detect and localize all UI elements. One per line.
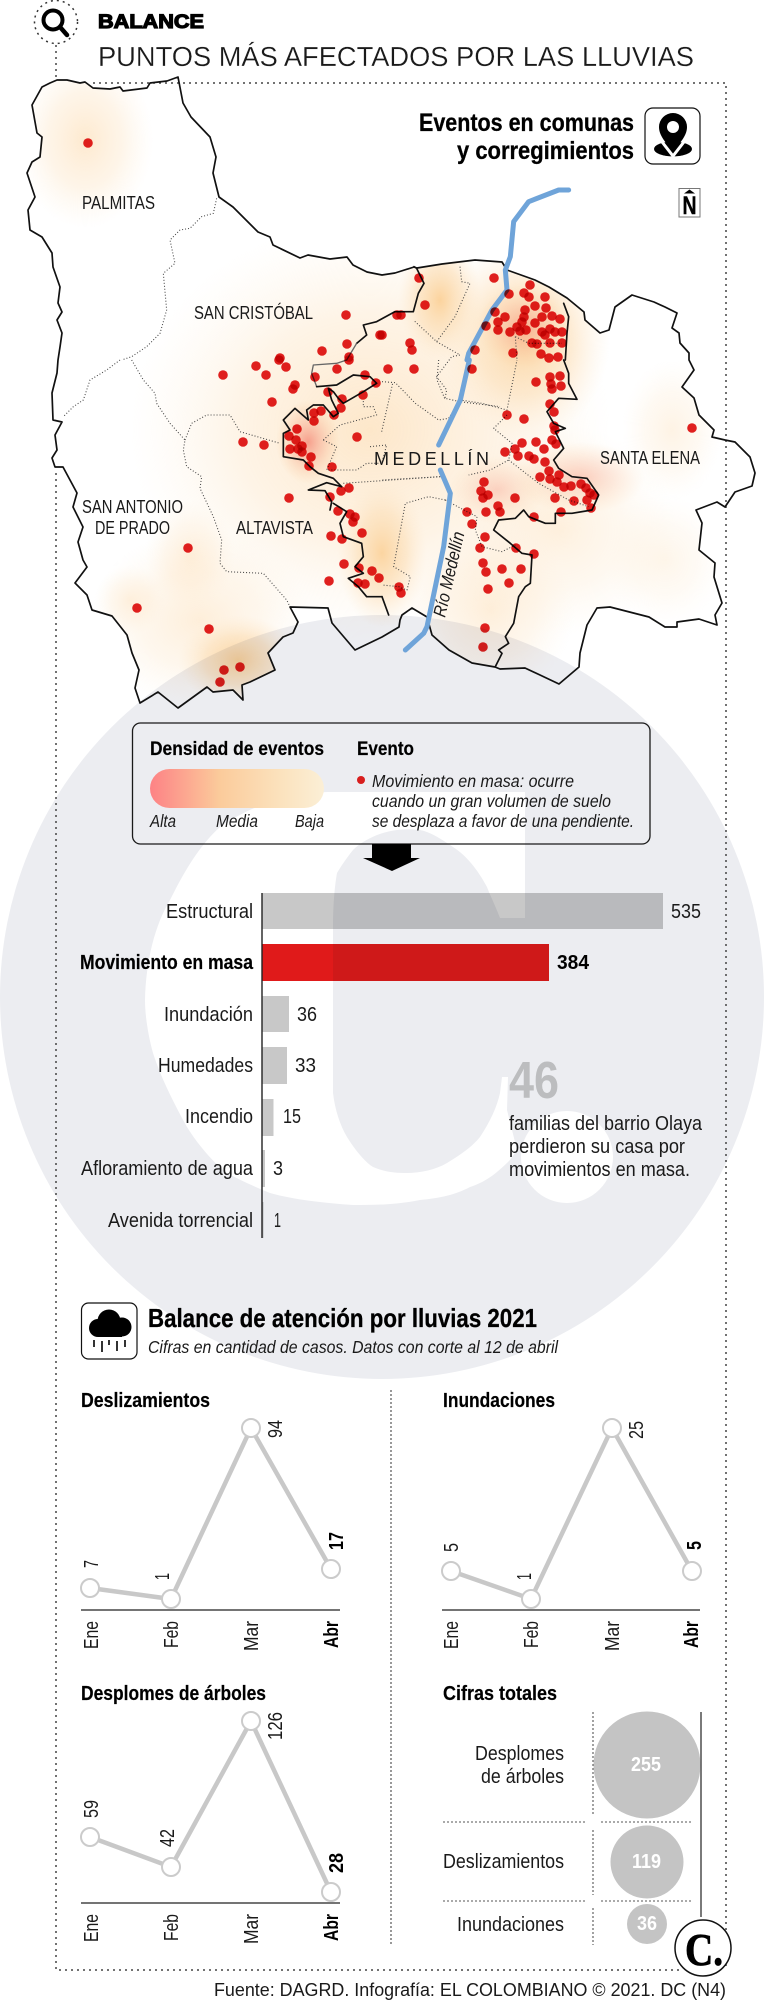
map place labels: DE PRADO bbox=[95, 518, 170, 538]
line chart: desplomes de árboles bbox=[81, 1683, 348, 1944]
line chart: deslizamientos: 1 bbox=[152, 1573, 174, 1580]
icon: map pin bbox=[645, 108, 700, 164]
line chart: inundaciones: 5 bbox=[684, 1541, 706, 1550]
legend: Alta bbox=[149, 811, 176, 831]
legend: Media bbox=[216, 811, 258, 831]
line chart: deslizamientos: Feb bbox=[161, 1621, 183, 1648]
panel: cifras totales: Inundaciones bbox=[457, 1914, 564, 1936]
map place labels bbox=[82, 193, 700, 619]
legend: Densidad de eventos bbox=[150, 738, 324, 760]
heading: balance de atención: Cifras en cantidad de casos. Datos con corte al 12 de abril bbox=[148, 1337, 559, 1357]
map heading: y corregimientos bbox=[457, 137, 634, 165]
map place labels: PALMITAS bbox=[82, 193, 155, 213]
panel: cifras totales: 119 bbox=[632, 1851, 661, 1873]
map place labels: SANTA ELENA bbox=[600, 448, 700, 468]
legend: Baja bbox=[295, 811, 324, 831]
line chart: inundaciones: Abr bbox=[681, 1621, 703, 1648]
line chart: desplomes de árboles: 126 bbox=[265, 1712, 287, 1740]
density heat blobs bbox=[34, 81, 706, 698]
line chart: inundaciones: 5 bbox=[441, 1543, 463, 1552]
density gradient scale bbox=[150, 769, 324, 808]
panel: cifras totales bbox=[443, 1683, 701, 1945]
bar labels: Movimiento en masa bbox=[80, 952, 254, 974]
bar labels: Avenida torrencial bbox=[108, 1210, 253, 1232]
line chart: inundaciones: Mar bbox=[602, 1621, 624, 1651]
map place labels: Río Medellín bbox=[429, 530, 468, 619]
legend: Evento bbox=[357, 738, 414, 760]
map place labels: SAN CRISTÓBAL bbox=[194, 302, 313, 323]
legend: se desplaza a favor de una pendiente. bbox=[372, 811, 634, 831]
line chart: deslizamientos: 17 bbox=[326, 1532, 348, 1550]
bar values: 33 bbox=[295, 1055, 316, 1077]
title: headline: PUNTOS MÁS AFECTADOS POR LAS LLUVIAS bbox=[98, 41, 694, 72]
bar labels: Inundación bbox=[164, 1004, 253, 1026]
panel: cifras totales: de árboles bbox=[481, 1766, 564, 1788]
panel: cifras totales: 255 bbox=[631, 1754, 661, 1776]
bar values: 3 bbox=[273, 1158, 283, 1180]
river: Río Medellín bbox=[405, 190, 569, 650]
source line: Fuente: DAGRD. Infografía: EL COLOMBIANO © 2021. DC (N4) bbox=[214, 1979, 726, 2000]
bar values: 36 bbox=[297, 1004, 317, 1026]
bar values: 15 bbox=[283, 1106, 301, 1128]
panel: cifras totales: Cifras totales bbox=[443, 1683, 557, 1705]
bars bbox=[262, 893, 663, 1238]
bar labels bbox=[80, 901, 254, 1232]
line chart: deslizamientos: Abr bbox=[321, 1621, 343, 1648]
icon: magnifier bbox=[34, 0, 78, 44]
map place labels: ALTAVISTA bbox=[236, 518, 313, 538]
map place labels: SAN ANTONIO bbox=[82, 497, 183, 517]
icon: north arrow: N bbox=[682, 192, 696, 220]
heading: balance de atención: Balance de atención por lluvias 2021 bbox=[148, 1303, 537, 1333]
bar chart: events by type bbox=[80, 893, 701, 1238]
line chart: inundaciones: 1 bbox=[514, 1573, 536, 1580]
event dots bbox=[83, 138, 697, 687]
callout: 46 familias: 46 bbox=[509, 1052, 559, 1110]
urban perimeter bbox=[283, 267, 599, 667]
legend bbox=[132, 723, 650, 844]
line chart: desplomes de árboles: 59 bbox=[81, 1800, 103, 1818]
commune dotted boundaries bbox=[63, 198, 589, 607]
panel: cifras totales: Desplomes bbox=[475, 1743, 564, 1765]
bar values bbox=[273, 901, 701, 1232]
panel: cifras totales: 36 bbox=[637, 1913, 657, 1935]
bar values: 1 bbox=[274, 1210, 281, 1232]
callout: 46 familias: perdieron su casa por bbox=[509, 1136, 685, 1158]
line chart: desplomes de árboles: Feb bbox=[161, 1914, 183, 1941]
watermark: colombiano logo bbox=[0, 615, 764, 1379]
panel: cifras totales: Deslizamientos bbox=[443, 1851, 564, 1873]
line chart: desplomes de árboles: Ene bbox=[81, 1914, 103, 1942]
line chart: deslizamientos: Mar bbox=[241, 1621, 263, 1651]
outer municipal boundary bbox=[27, 77, 755, 708]
line chart: deslizamientos: Ene bbox=[81, 1621, 103, 1649]
bar values: 535 bbox=[671, 901, 701, 923]
line chart: desplomes de árboles: 42 bbox=[157, 1829, 179, 1847]
logo: El Colombiano C: C. bbox=[685, 1924, 723, 1975]
line chart: inundaciones: Inundaciones bbox=[443, 1390, 555, 1412]
bar labels: Humedades bbox=[158, 1055, 253, 1077]
title: kicker: BALANCE bbox=[98, 12, 204, 33]
legend: cuando un gran volumen de suelo bbox=[372, 791, 611, 811]
bar labels: Afloramiento de agua bbox=[81, 1158, 254, 1180]
bar values: 384 bbox=[557, 952, 590, 974]
line chart: inundaciones bbox=[441, 1390, 706, 1651]
line chart: deslizamientos: Deslizamientos bbox=[81, 1390, 210, 1412]
bar labels: Estructural bbox=[166, 901, 253, 923]
line chart: deslizamientos: 7 bbox=[81, 1560, 103, 1568]
line chart: inundaciones: Feb bbox=[521, 1621, 543, 1648]
callout: 46 familias: familias del barrio Olaya bbox=[509, 1113, 703, 1135]
map: density of events bbox=[17, 52, 755, 710]
line chart: desplomes de árboles: Abr bbox=[321, 1914, 343, 1941]
map heading: Eventos en comunas bbox=[419, 109, 634, 137]
legend: Movimiento en masa: ocurre bbox=[372, 771, 574, 791]
map heading bbox=[419, 109, 634, 165]
callout: 46 familias bbox=[509, 1052, 703, 1181]
line chart: desplomes de árboles: Desplomes de árboles bbox=[81, 1683, 266, 1705]
heading: balance de atención bbox=[148, 1303, 559, 1357]
line chart: deslizamientos bbox=[81, 1390, 348, 1651]
line chart: deslizamientos: 94 bbox=[265, 1420, 287, 1438]
line chart: desplomes de árboles: Mar bbox=[241, 1914, 263, 1944]
line chart: desplomes de árboles: 28 bbox=[326, 1853, 348, 1873]
bar labels: Incendio bbox=[185, 1106, 253, 1128]
callout: 46 familias: movimientos en masa. bbox=[509, 1159, 690, 1181]
line chart: inundaciones: Ene bbox=[441, 1621, 463, 1649]
divider dotted bbox=[390, 1390, 392, 1945]
line chart: inundaciones: 25 bbox=[626, 1421, 648, 1439]
icon: rain cloud bbox=[82, 1303, 137, 1359]
map place labels: MEDELLÍN bbox=[374, 449, 489, 469]
arrow down bbox=[363, 844, 420, 871]
